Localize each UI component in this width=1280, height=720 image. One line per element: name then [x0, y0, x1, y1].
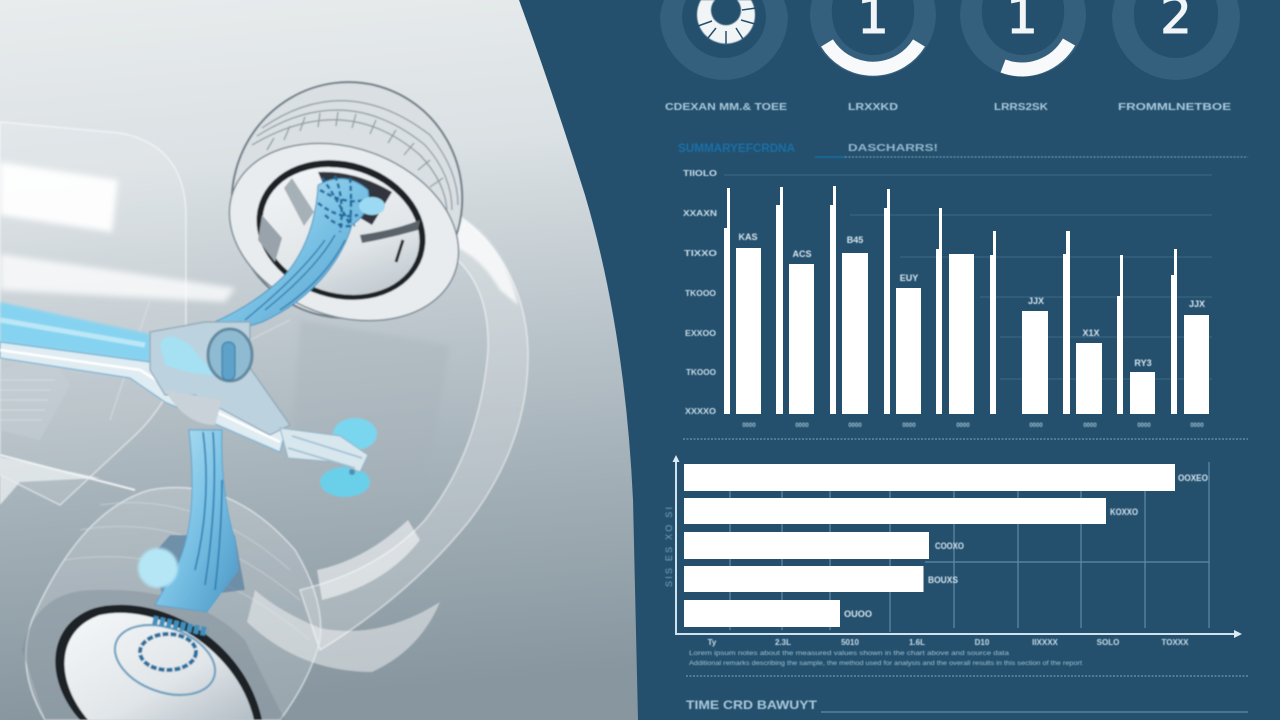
bottom heading: TIME CRD BAWUYT: [686, 698, 818, 712]
value labels: KOXXO: [1110, 507, 1138, 517]
rotated y label: SIS ES XO SI: [664, 507, 674, 587]
horizontal bar chart: [664, 455, 1242, 667]
bar value labels: [738, 232, 1205, 368]
section heading: column chart: SUMMARYEFCRDNA: [678, 141, 795, 155]
x axis labels: 2.3L: [775, 638, 791, 647]
y axis labels: TIXXO: [684, 249, 717, 258]
bar x labels: 0000: [956, 423, 970, 429]
column chart: [683, 169, 1212, 429]
bar x labels: 0000: [795, 423, 809, 429]
value labels: BOUXS: [928, 575, 958, 585]
large translucent fender curve: [247, 215, 528, 672]
bars: [684, 464, 1175, 627]
donut 2: [810, 0, 936, 77]
central hub joint: [150, 322, 290, 435]
donut 3: [960, 0, 1086, 77]
bar value labels: ACS: [792, 249, 812, 259]
donut labels: CDEXAN MM.& TOEE: [665, 102, 787, 113]
bar value labels: RY3: [1134, 358, 1152, 368]
y axis labels: TKOOO: [686, 368, 716, 377]
bar x labels: [742, 423, 1204, 429]
bar x labels: 0000: [1029, 423, 1043, 429]
x axis labels: SOLO: [1097, 638, 1119, 647]
thin bars: [724, 186, 1177, 414]
bar value labels: KAS: [738, 232, 758, 242]
left background: [0, 0, 660, 720]
bar x labels: 0000: [902, 423, 916, 429]
gear icon: [697, 0, 756, 44]
bar x labels: 0000: [742, 423, 756, 429]
value labels: OUOO: [844, 609, 872, 619]
right arm with cyan pads: [280, 418, 377, 497]
right dark blue panel: [519, 0, 1280, 720]
y axis labels: TIIOLO: [683, 169, 717, 178]
car body outline left: [0, 122, 290, 505]
x axis labels: D10: [975, 638, 990, 647]
bar value labels: JJX: [1028, 296, 1044, 306]
bar x labels: 0000: [848, 423, 862, 429]
donut 1 with gear icon: [660, 0, 788, 80]
donut 4: [1112, 0, 1240, 80]
blue arm to top wheel: [208, 176, 385, 335]
value labels: COOXO: [935, 541, 964, 551]
bar x labels: 0000: [1137, 423, 1151, 429]
section heading: column chart: [678, 141, 1248, 157]
x axis labels: [708, 638, 1189, 647]
footnote text: Additional remarks describing the sample, the method used for analysis and the overall results in this section of the report: [689, 661, 1082, 667]
y axis labels: XXAXN: [683, 209, 717, 218]
footnote text: [689, 651, 1082, 667]
axes: [672, 455, 1242, 638]
value labels: OOXEO: [1178, 473, 1208, 483]
bar value labels: JJX: [1189, 299, 1205, 309]
y axis labels: [683, 169, 717, 416]
donut labels: [665, 102, 1231, 113]
bar value labels: X1X: [1082, 328, 1100, 338]
grid: [730, 462, 1209, 632]
main bars: [736, 248, 1209, 414]
rim: [55, 605, 262, 720]
bar value labels: EUY: [900, 273, 918, 283]
section heading: column chart: DASCHARRS!: [848, 143, 938, 154]
x axis labels: IIXXXX: [1032, 638, 1059, 647]
bar x labels: 0000: [1190, 423, 1204, 429]
top wheel: [204, 56, 489, 351]
x axis labels: 1.6L: [909, 638, 925, 647]
value labels: [844, 473, 1208, 619]
footnote text: Lorem ipsum notes about the measured values shown in the chart above and source data: [689, 651, 1010, 657]
x axis labels: Ty: [708, 638, 717, 647]
bar x labels: 0000: [1083, 423, 1097, 429]
lower wheel hub swirl: [105, 612, 225, 708]
donut labels: LRRS2SK: [994, 102, 1049, 113]
y axis labels: XXXXO: [685, 407, 716, 416]
donut labels: FROMMLNETBOE: [1118, 102, 1231, 113]
y axis labels: EXXOO: [685, 329, 716, 338]
vertical blue strut: [138, 430, 245, 612]
bar value labels: B45: [847, 235, 863, 245]
donut labels: LRXXKD: [848, 102, 898, 113]
horizontal bright blue beam: [0, 302, 285, 452]
lower wheel: [22, 488, 321, 720]
tread grooves: [252, 101, 458, 212]
illustration: translucent suspension and wheels: [0, 56, 528, 720]
x axis labels: TOXXX: [1162, 638, 1189, 647]
x axis labels: 5010: [841, 638, 859, 647]
y axis labels: TKOOO: [685, 289, 716, 298]
